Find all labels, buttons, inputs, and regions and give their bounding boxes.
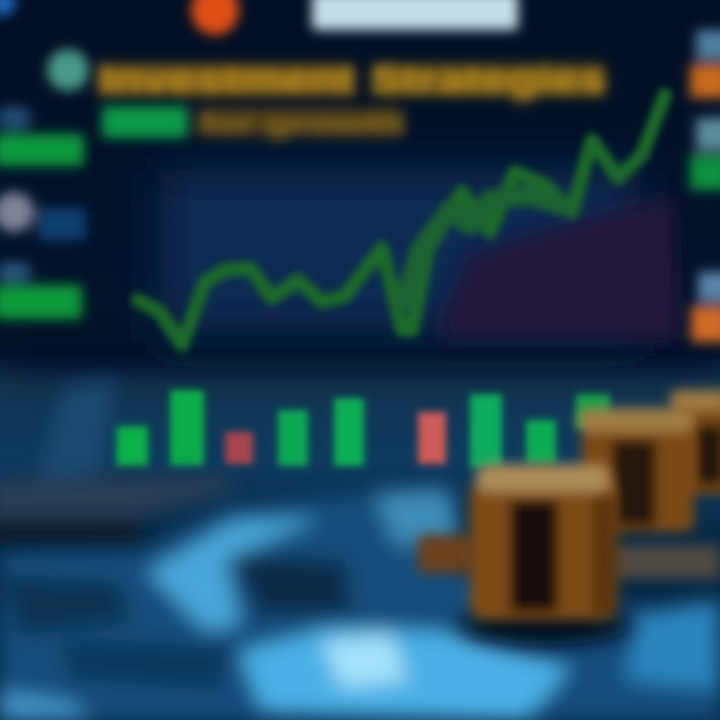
subtitle <box>102 106 406 141</box>
line chart <box>138 95 665 345</box>
wooden peg <box>418 535 720 579</box>
screen glow <box>0 170 720 368</box>
front block <box>470 464 618 620</box>
back block right <box>670 390 720 494</box>
top-left blue corner <box>0 0 16 16</box>
top header fragments <box>0 0 518 35</box>
back block middle <box>578 408 694 532</box>
area under line chart <box>440 195 680 340</box>
icon: round green badge <box>47 49 89 91</box>
candlestick bars <box>116 390 610 468</box>
title: Investment Strategies <box>98 58 606 102</box>
right sidebar stats <box>690 30 720 342</box>
wooden blocks <box>418 390 720 645</box>
laptop <box>0 380 240 544</box>
block shadow <box>460 605 630 645</box>
subtitle: for growth <box>198 108 406 141</box>
top white banner <box>312 0 518 30</box>
financial papers on desk <box>0 485 720 720</box>
left sidebar stats <box>0 106 86 319</box>
icon: orange top badge <box>191 0 239 35</box>
